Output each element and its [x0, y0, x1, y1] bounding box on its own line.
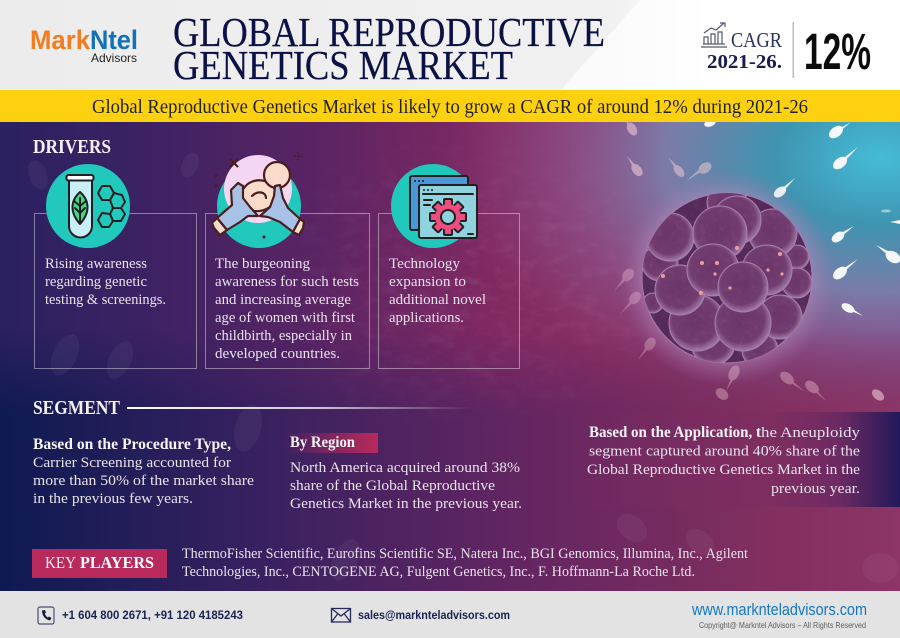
- icon: envelope: [332, 608, 350, 622]
- website and copyright: [691, 601, 867, 630]
- title: GENETICS MARKET: [173, 42, 513, 88]
- text block: by region: Genetics Market in the previous year.: [290, 496, 522, 512]
- panel: driver 2: [206, 152, 370, 368]
- text block: Technology: [389, 256, 460, 272]
- text block: application: he Aneuploidy: [761, 425, 861, 441]
- icon: test tube with leaf: [46, 164, 130, 248]
- text block: application: Based on the Application, t: [589, 424, 762, 441]
- yellow subtitle banner: [0, 90, 900, 122]
- text block: procedure type: in the previous few years.: [33, 491, 193, 507]
- text block: regarding genetic: [45, 274, 147, 290]
- embryo cell: [628, 176, 828, 380]
- text block: procedure type: Carrier Screening accounted for: [33, 455, 231, 471]
- key players label: PLAYERS: [80, 553, 154, 572]
- logo: Ntel: [90, 25, 138, 55]
- text block: by region: By Region: [290, 434, 355, 451]
- logo: Advisors: [91, 51, 137, 65]
- text block: [215, 256, 359, 362]
- CAGR badge: [701, 22, 871, 80]
- icon: software windows and gear: [391, 164, 477, 248]
- website and copyright: Copyright@ Markntel Advisors – All Rights Reserved: [699, 620, 866, 630]
- text block: application: [587, 424, 861, 497]
- text block: procedure type: Based on the Procedure Type,: [33, 436, 231, 453]
- logo: [30, 25, 138, 65]
- yellow subtitle banner: Global Reproductive Genetics Market is likely to grow a CAGR of around 12% during 2021-26: [92, 96, 808, 118]
- key players label: KEY: [45, 553, 76, 572]
- text block: awareness for such tests: [215, 274, 359, 290]
- text block: Rising awareness: [45, 256, 147, 272]
- title: GLOBAL REPRODUCTIVE: [173, 9, 605, 55]
- text block: additional novel: [389, 292, 486, 308]
- icon: phone: [38, 607, 54, 624]
- text block: application: segment captured around 40% share of the: [589, 444, 860, 460]
- text block: The burgeoning: [215, 256, 310, 272]
- text block: by region: [283, 433, 522, 512]
- bright sperm cells: [703, 118, 900, 316]
- footer band: [0, 591, 900, 638]
- text block: procedure type: [33, 436, 254, 507]
- CAGR badge: CAGR: [731, 28, 782, 52]
- text block: and increasing average: [215, 292, 351, 308]
- text block: developed countries.: [215, 346, 340, 362]
- text block: [389, 256, 486, 326]
- text block: testing & screenings.: [45, 292, 166, 308]
- key players label: [32, 549, 167, 578]
- text block: by region: share of the Global Reproductive: [290, 478, 495, 494]
- logo: Mark: [30, 25, 91, 55]
- panel: driver 1: [34, 164, 196, 368]
- dim sperm cells: [614, 121, 886, 403]
- CAGR badge: 2021-26.: [707, 51, 782, 73]
- key players list: Technologies, Inc., CENTOGENE AG, Fulgent Genetics, Inc., F. Hoffmann-La Roche Ltd.: [182, 564, 695, 580]
- panel: driver 3: [378, 164, 520, 368]
- heading: segment: SEGMENT: [33, 397, 121, 419]
- phone contact: [38, 607, 243, 624]
- text block: by region: North America acquired around 38%: [290, 460, 520, 476]
- email contact: sales@marknteladvisors.com: [358, 610, 510, 622]
- text block: application: previous year.: [771, 481, 860, 497]
- title: [173, 9, 605, 88]
- phone contact: +1 604 800 2671, +91 120 4185243: [62, 610, 243, 622]
- icon: baby in hands: [212, 152, 304, 248]
- website and copyright: www.marknteladvisors.com: [691, 601, 867, 619]
- icon: growth chart: [701, 23, 727, 47]
- key players list: ThermoFisher Scientific, Eurofins Scientific SE, Natera Inc., BGI Genomics, Illumina, Inc., Agilent: [182, 546, 749, 562]
- application panel background: [786, 412, 900, 507]
- text block: [45, 256, 166, 308]
- text block: childbirth, especially in: [215, 328, 352, 344]
- text block: applications.: [389, 310, 464, 326]
- main background with embryo photo: [0, 118, 900, 592]
- faint background sperm shapes: [24, 150, 898, 585]
- text block: procedure type: more than 50% of the market share: [33, 473, 254, 489]
- heading: drivers: DRIVERS: [33, 136, 111, 158]
- text block: age of women with first: [215, 310, 356, 326]
- header band: [0, 0, 900, 91]
- key players list: [182, 546, 749, 580]
- text block: expansion to: [389, 274, 466, 290]
- text block: application: Global Reproductive Genetics Market in the: [587, 462, 860, 478]
